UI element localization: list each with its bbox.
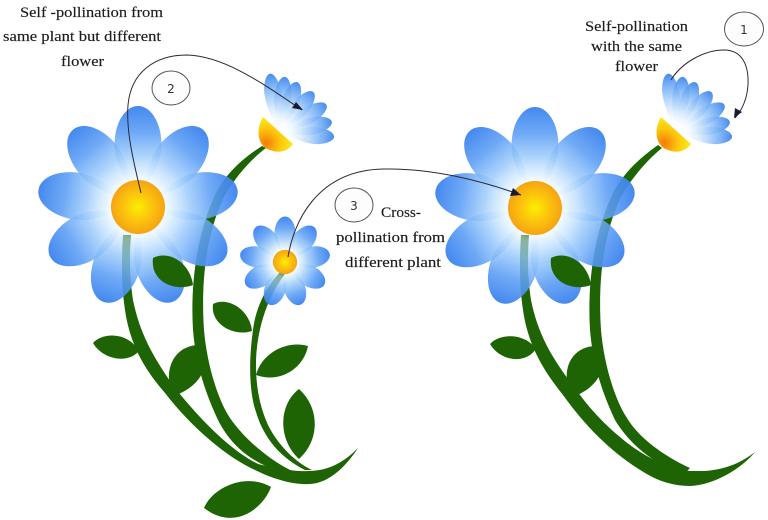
left plant: second stem	[192, 146, 292, 474]
left plant: bottom leaf	[204, 481, 271, 518]
left plant: leaf on third stem upper	[213, 302, 252, 333]
label: cross-pollination from different plant: different plant	[345, 255, 441, 271]
label: self-pollination from same plant but different flower: Self -pollination from	[20, 5, 164, 21]
label: self-pollination with the same flower: Self-pollination	[585, 19, 689, 35]
right plant: second stem	[589, 145, 690, 474]
arrow 3: cross-pollination	[288, 169, 521, 257]
small flower on different stem	[238, 217, 332, 308]
badge 2: 2	[167, 82, 175, 96]
label: self-pollination from same plant but different flower	[3, 5, 164, 70]
right plant: leaf between stems	[567, 346, 602, 397]
right large flower	[431, 107, 639, 311]
badge 3: 3	[350, 199, 358, 213]
label: self-pollination with the same flower	[585, 19, 689, 75]
left plant: main stem	[122, 235, 358, 484]
left plant: leaf on third stem middle	[256, 344, 308, 378]
right plant: main stem	[520, 235, 755, 486]
arrow 2: same plant different flower	[128, 55, 303, 193]
right plant: leaf over petal	[551, 256, 591, 287]
left plant: third stem	[250, 272, 312, 470]
badge 1	[724, 12, 764, 46]
label: self-pollination with the same flower: flower	[615, 59, 658, 75]
label: cross-pollination from different plant	[336, 205, 446, 271]
badge 3	[335, 188, 373, 222]
left large flower	[34, 106, 242, 310]
left plant: leaf over petal	[153, 256, 193, 287]
right side-view flower	[657, 72, 733, 152]
left side-view flower	[259, 72, 335, 152]
left plant: leaf between stems	[169, 345, 205, 396]
label: cross-pollination from different plant: pollination from	[336, 230, 446, 246]
label: self-pollination from same plant but different flower: flower	[61, 54, 104, 70]
label: self-pollination with the same flower: with the same	[591, 39, 682, 55]
left plant: upright leaf	[283, 389, 315, 459]
badge 1: 1	[740, 23, 748, 37]
badge 2	[152, 71, 190, 105]
label: cross-pollination from different plant: Cross-	[381, 205, 421, 221]
arrow 1: same flower	[671, 50, 748, 118]
label: self-pollination from same plant but different flower: same plant but different	[3, 29, 161, 45]
left plant: leaf far left	[93, 336, 139, 359]
right plant: left leaf	[490, 336, 536, 359]
